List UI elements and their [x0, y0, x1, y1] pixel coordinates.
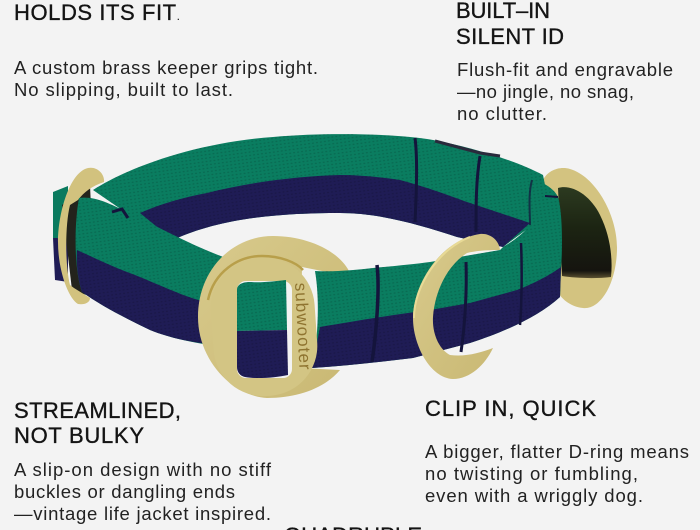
text block: clip in, quick: even with a wriggly dog.	[425, 485, 643, 506]
right disc	[543, 168, 617, 308]
buckle	[207, 255, 321, 399]
text block: streamlined	[14, 459, 272, 524]
buckle round ring	[198, 236, 349, 398]
text block: holds its fit: No slipping, built to last.	[14, 79, 233, 100]
front right band	[312, 180, 562, 368]
D-ring	[413, 234, 500, 379]
buckle slider plate	[207, 255, 321, 399]
text block: clip in, quick: no twisting or fumbling,	[425, 463, 638, 484]
heading: streamlined: STREAMLINED,	[14, 398, 181, 423]
front left band	[76, 198, 240, 345]
heading: built-in silent id	[456, 0, 564, 49]
buckle slot and strap	[237, 280, 292, 378]
collar illustration	[53, 134, 617, 399]
text block: clip in, quick: A bigger, flatter D-ring means	[425, 441, 689, 462]
left strap end behind disc	[53, 185, 95, 298]
text block: built-in silent id	[457, 59, 673, 124]
text block: streamlined: —vintage life jacket inspired.	[14, 503, 271, 524]
heading: streamlined	[14, 398, 181, 448]
left disc rim	[58, 168, 104, 304]
text block: clip in, quick	[425, 441, 689, 506]
heading: streamlined: NOT BULKY	[14, 423, 144, 448]
text block: holds its fit	[14, 57, 318, 100]
text block: streamlined: buckles or dangling ends	[14, 481, 235, 502]
text block: built-in silent id: Flush-fit and engravable	[457, 59, 673, 80]
text block: built-in silent id: no clutter.	[457, 103, 547, 124]
text block: holds its fit: A custom brass keeper grips tight.	[14, 57, 318, 78]
logo text: subwooter	[291, 282, 315, 370]
back band	[93, 134, 548, 247]
heading: holds its fit: HOLDS ITS FIT.	[14, 0, 180, 25]
text block: built-in silent id: —no jingle, no snag,	[457, 81, 634, 102]
text block: streamlined: A slip-on design with no stiff	[14, 459, 272, 480]
heading: clip in, quick: CLIP IN, QUICK	[425, 396, 596, 421]
heading: built-in silent id: SILENT ID	[456, 24, 564, 49]
